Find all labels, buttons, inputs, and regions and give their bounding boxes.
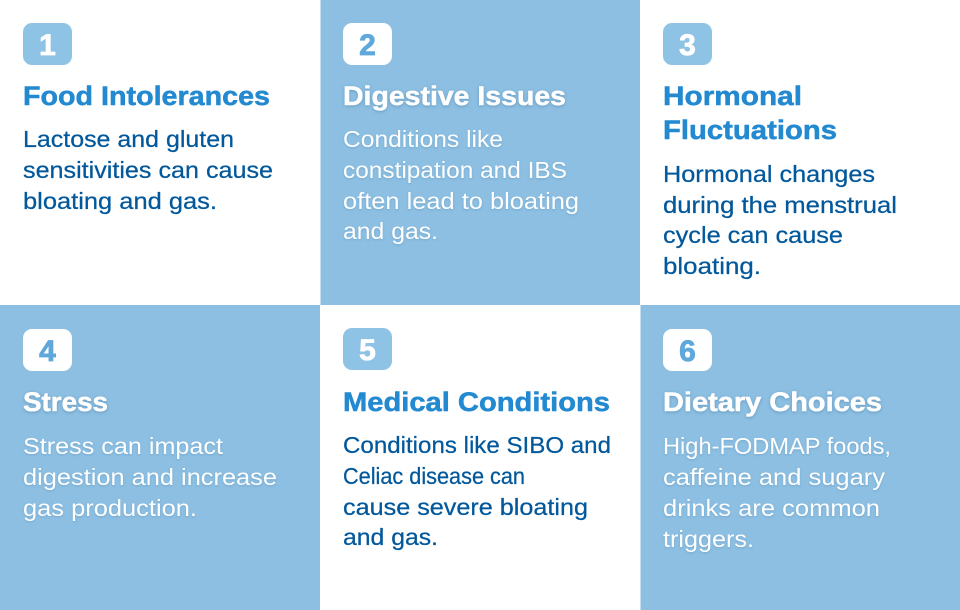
panel: stress [0, 305, 320, 610]
heading: hormonal fluctuations: Hormonal [663, 81, 802, 111]
number badge 6 [663, 329, 712, 371]
heading: hormonal fluctuations [663, 81, 837, 145]
heading: food intolerances: Food Intolerances [23, 81, 270, 111]
heading: hormonal fluctuations: Fluctuations [663, 115, 837, 145]
heading: digestive issues: Digestive Issues [343, 81, 566, 111]
text: stress description: digestion and increase [23, 464, 277, 490]
text: food intolerances description [23, 126, 273, 214]
text: dietary choices description: triggers. [663, 526, 754, 552]
text: digestive issues description: constipation and IBS [343, 157, 567, 183]
text: hormonal fluctuations description: cycle can cause [663, 222, 843, 248]
heading: dietary choices: Dietary Choices [663, 387, 882, 417]
text: digestive issues description [343, 126, 579, 244]
number badge 3: 3 [679, 29, 696, 62]
text: medical conditions description: and gas. [343, 524, 438, 550]
number badge 1 [23, 23, 72, 65]
text: stress description [23, 433, 277, 521]
number badge 2 [343, 23, 392, 65]
text: hormonal fluctuations description [663, 161, 897, 279]
text: food intolerances description: bloating and gas. [23, 188, 217, 214]
number badge 4: 4 [39, 335, 56, 368]
panel: hormonal fluctuations [640, 0, 960, 305]
number badge 5 [343, 328, 392, 370]
text: digestive issues description: Conditions like [343, 126, 503, 152]
text: food intolerances description: Lactose and gluten [23, 126, 234, 152]
number badge 3 [663, 23, 712, 65]
text: medical conditions description: Celiac disease can [343, 463, 525, 489]
panel: medical conditions [320, 305, 640, 610]
text: stress description: gas production. [23, 495, 197, 521]
text: dietary choices description [663, 433, 891, 552]
text: hormonal fluctuations description: bloating. [663, 253, 761, 279]
number badge 6: 6 [679, 335, 696, 368]
number badge 1: 1 [39, 29, 56, 62]
text: dietary choices description: High-FODMAP foods, [663, 433, 891, 459]
panel: dietary choices [640, 305, 960, 610]
panel: digestive issues [320, 0, 640, 305]
number badge 4 [23, 329, 72, 371]
text: dietary choices description: caffeine and sugary [663, 464, 886, 490]
number badge 2: 2 [359, 29, 376, 62]
text: medical conditions description: Conditions like SIBO and [343, 432, 611, 458]
text: hormonal fluctuations description: during the menstrual [663, 192, 897, 218]
text: food intolerances description: sensitivities can cause [23, 157, 273, 183]
text: digestive issues description: and gas. [343, 218, 438, 244]
text: stress description: Stress can impact [23, 433, 224, 459]
text: hormonal fluctuations description: Hormonal changes [663, 161, 875, 187]
number badge 5: 5 [359, 334, 376, 367]
text: dietary choices description: drinks are common [663, 495, 880, 521]
text: medical conditions description: cause severe bloating [343, 494, 588, 520]
heading: medical conditions: Medical Conditions [343, 387, 610, 417]
heading: stress: Stress [23, 387, 108, 417]
text: digestive issues description: often lead to bloating [343, 188, 579, 214]
text: medical conditions description [343, 432, 611, 550]
panel: food intolerances [0, 0, 320, 305]
